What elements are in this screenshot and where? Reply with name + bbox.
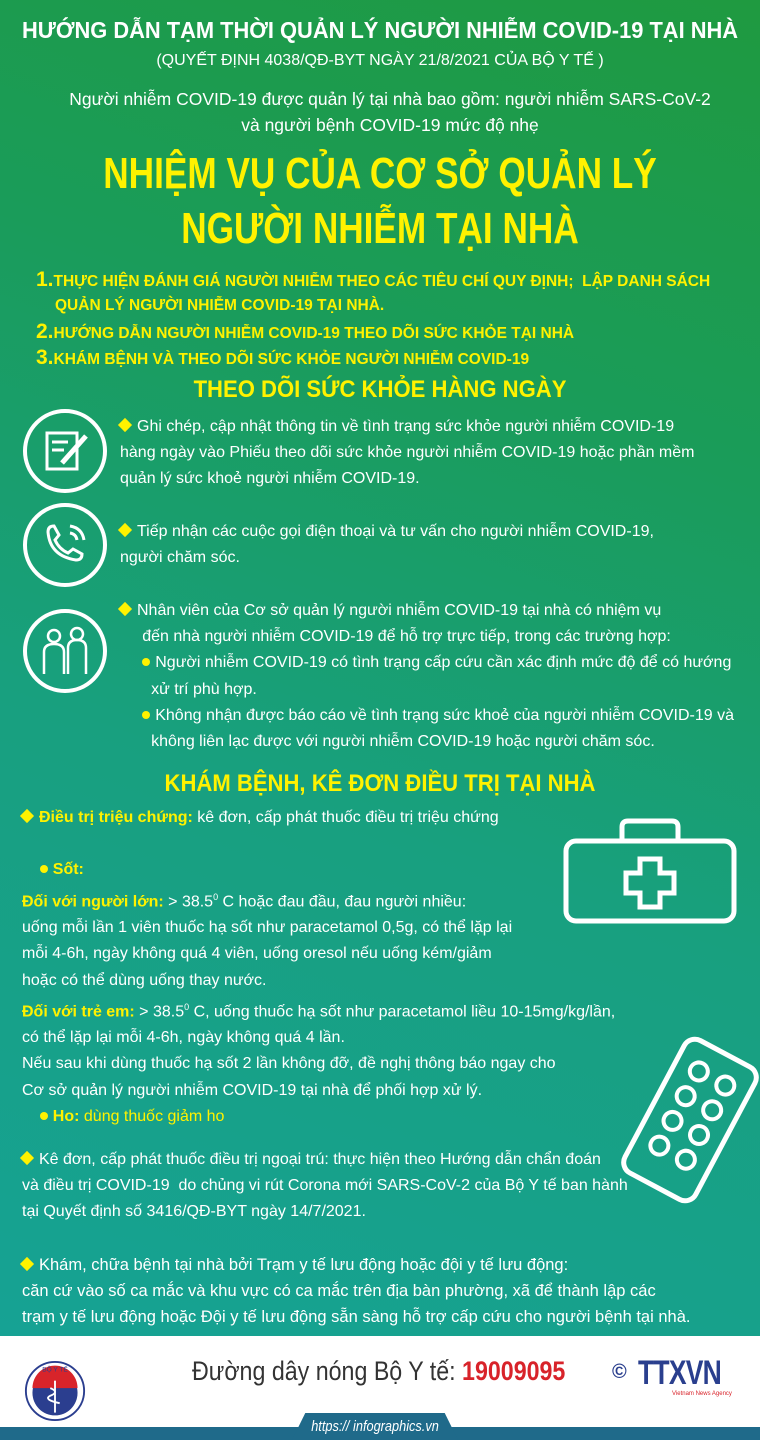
text: symptom treatment [20,809,615,1125]
text: symptom treatment: Sốt: [53,861,84,878]
text: home visits: xử trí phù hợp. [151,681,257,698]
logo: TTXVN [612,1354,732,1397]
text: outpatient prescription: Kê đơn, cấp phát thuốc điều trị ngoại trú: thực hiện theo Hướng dẫn chẩn đoán [39,1151,601,1168]
subtitle: (QUYẾT ĐỊNH 4038/QĐ-BYT NGÀY 21/8/2021 CỦA BỘ Y TẾ ) [156,52,604,69]
text: phone support: Tiếp nhận các cuộc gọi điện thoại và tư vấn cho người nhiễm COVID-19, [137,523,654,540]
text: home visits [118,601,734,750]
text: symptom treatment: mỗi 4-6h, ngày không quá 4 viên, uống oresol nếu uống kém/giảm [22,945,492,962]
task list [36,268,710,369]
icon: care staff [23,609,107,693]
heading: daily monitoring: THEO DÕI SỨC KHỎE HÀNG NGÀY [194,376,566,403]
text: symptom treatment: Cơ sở quản lý người nhiễm COVID-19 tại nhà để phối hợp xử lý. [22,1082,482,1099]
text: mobile medical stations [20,1256,690,1326]
main heading [103,149,657,253]
text: symptom treatment: có thể lặp lại mỗi 4-6h, ngày không quá 4 lần. [22,1029,345,1046]
icon: notepad [23,409,107,493]
text: outpatient prescription [20,1150,628,1220]
text: record keeping [118,417,694,487]
text: symptom treatment: Đối với người lớn: > 38.50 C hoặc đau đầu, đau người nhiều: [22,892,466,910]
logo: ministry of health [24,1361,86,1421]
text: symptom treatment: Đối với trẻ em: > 38.50 C, uống thuốc hạ sốt như paracetamol liều 10-15mg/kg/lần, [22,1002,615,1020]
task list: 1.THỰC HIỆN ĐÁNH GIÁ NGƯỜI NHIỄM THEO CÁC TIÊU CHÍ QUY ĐỊNH; LẬP DANH SÁCH [36,268,710,291]
footer [0,1359,760,1440]
title: HƯỚNG DẪN TẠM THỜI QUẢN LÝ NGƯỜI NHIỄM COVID-19 TẠI NHÀ [22,17,738,43]
logo: TTXVN: © [612,1361,627,1383]
task list: 2.HƯỚNG DẪN NGƯỜI NHIỄM COVID-19 THEO DÕI SỨC KHỎE TẠI NHÀ [36,320,574,343]
icon: medical kit [564,818,736,924]
text: symptom treatment: Ho: dùng thuốc giảm ho [53,1108,224,1125]
intro text: và người bệnh COVID-19 mức độ nhẹ [241,115,539,135]
logo: TTXVN: Vietnam News Agency [672,1391,732,1397]
text: record keeping: hàng ngày vào Phiếu theo dõi sức khỏe người nhiễm COVID-19 hoặc phần mềm [120,444,694,461]
logo: ministry of health: BỘ Y TẾ [42,1363,68,1373]
bottom bar with url [0,1427,760,1440]
text: mobile medical stations: căn cứ vào số ca mắc và khu vực có ca mắc trên địa bàn phường, xã để thành lập các [22,1282,656,1300]
intro text: Người nhiễm COVID-19 được quản lý tại nhà bao gồm: người nhiễm SARS-CoV-2 [69,89,711,109]
text: phone support [118,522,654,566]
icon: phone [23,503,107,587]
icon: pill pack [621,1036,759,1204]
task list: 3.KHÁM BỆNH VÀ THEO DÕI SỨC KHỎE NGƯỜI NHIỄM COVID-19 [36,346,529,369]
intro text [69,89,711,135]
text: outpatient prescription: tại Quyết định số 3416/QĐ-BYT ngày 14/7/2021. [22,1203,366,1220]
text: home visits: không liên lạc được với người nhiễm COVID-19 hoặc người chăm sóc. [151,733,655,750]
main heading: NGƯỜI NHIỄM TẠI NHÀ [181,204,579,253]
text: mobile medical stations: trạm y tế lưu động hoặc Đội y tế lưu động sẵn sàng hỗ trợ cấp cứu cho người bệnh tại nhà. [22,1308,690,1326]
task list: QUẢN LÝ NGƯỜI NHIỄM COVID-19 TẠI NHÀ. [55,297,384,314]
logo: TTXVN: TTXVN [638,1354,721,1392]
text: symptom treatment: Điều trị triệu chứng: kê đơn, cấp phát thuốc điều trị triệu chứng [39,809,499,826]
text: record keeping: Ghi chép, cập nhật thông tin về tình trạng sức khỏe người nhiễm COVID-19 [137,418,674,435]
hotline: Đường dây nóng Bộ Y tế: 19009095 [192,1356,565,1386]
text: symptom treatment: Nếu sau khi dùng thuốc hạ sốt 2 lần không đỡ, đề nghị thông báo ngay cho [22,1055,556,1072]
text: home visits: Người nhiễm COVID-19 có tình trạng cấp cứu cần xác định mức độ để có hướng [155,654,731,671]
heading: treatment: KHÁM BỆNH, KÊ ĐƠN ĐIỀU TRỊ TẠI NHÀ [165,770,595,797]
text: symptom treatment: hoặc có thể dùng uống thay nước. [22,972,266,989]
text: outpatient prescription: và điều trị COVID-19 do chủng vi rút Corona mới SARS-CoV-2 của Bộ Y tế ban hành [22,1177,628,1194]
text: mobile medical stations: Khám, chữa bệnh tại nhà bởi Trạm y tế lưu động hoặc đội y tế lưu động: [39,1256,568,1274]
footer: https:// infographics.vn [311,1418,439,1435]
text: record keeping: quản lý sức khoẻ người nhiễm COVID-19. [120,470,420,487]
text: symptom treatment: uống mỗi lần 1 viên thuốc hạ sốt như paracetamol 0,5g, có thể lặp lại [22,919,512,936]
text: home visits: Không nhận được báo cáo về tình trạng sức khoẻ của người nhiễm COVID-19 và [155,707,734,724]
main heading: NHIỆM VỤ CỦA CƠ SỞ QUẢN LÝ [103,149,657,198]
text: phone support: người chăm sóc. [120,549,240,566]
text: home visits: đến nhà người nhiễm COVID-19 để hỗ trợ trực tiếp, trong các trường hợp: [142,628,671,645]
text: home visits: Nhân viên của Cơ sở quản lý người nhiễm COVID-19 tại nhà có nhiệm vụ [137,602,661,619]
